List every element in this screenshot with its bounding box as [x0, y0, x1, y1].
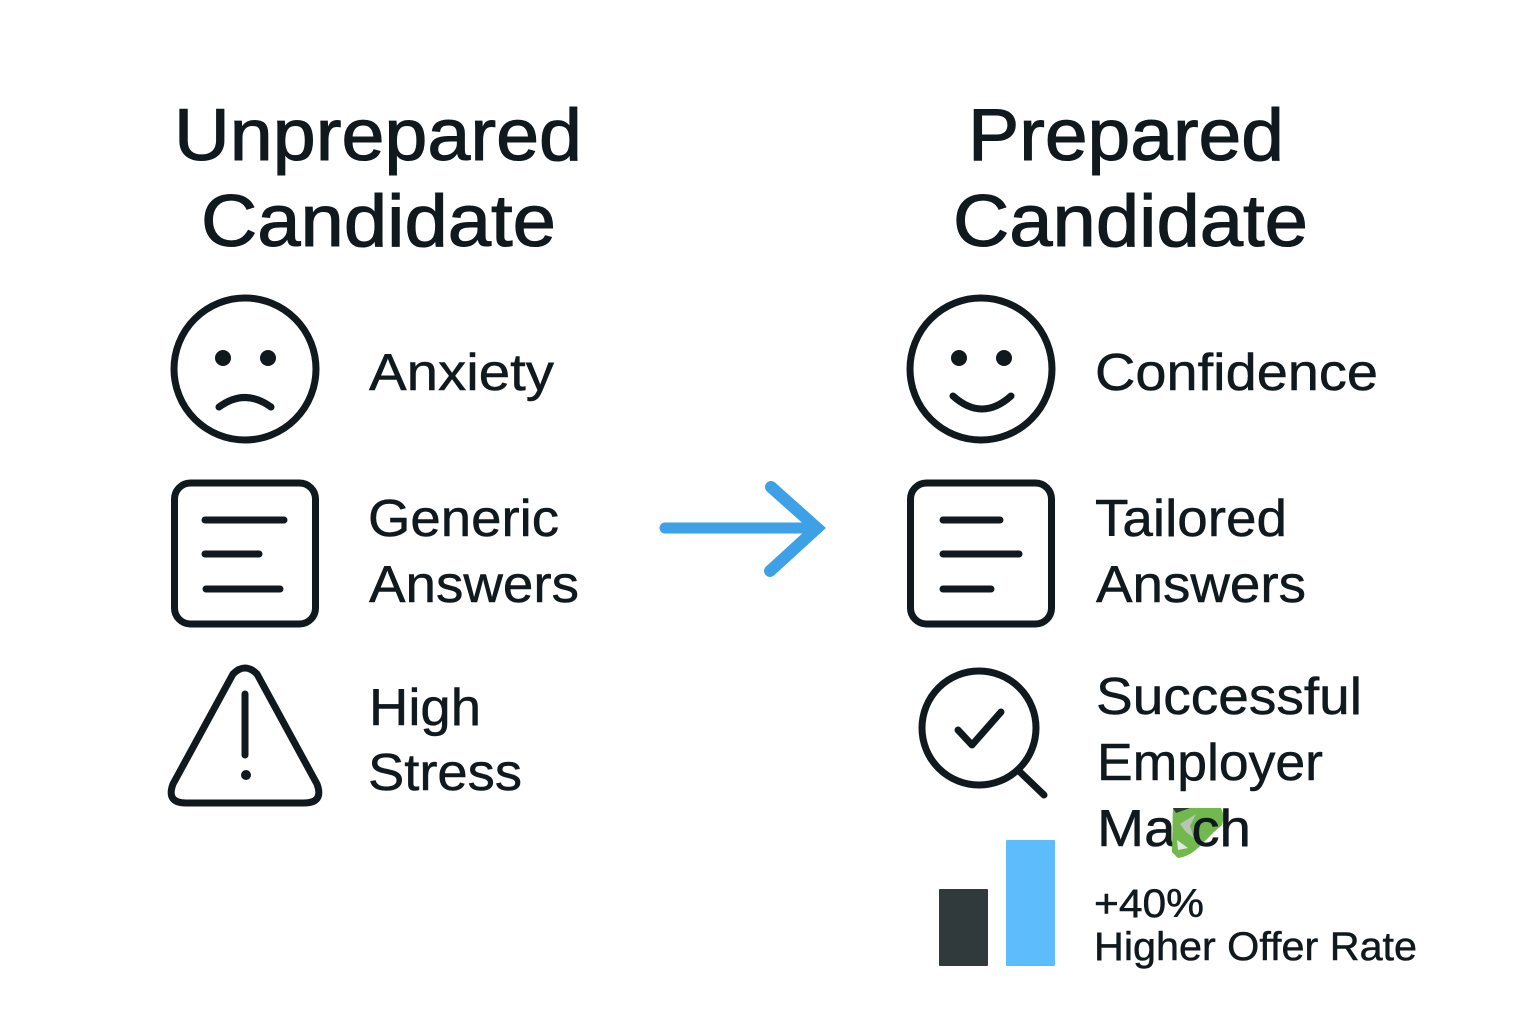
label: Anxiety: Anxiety: [369, 344, 554, 402]
callout: +40% Higher Offer Rate: +40%: [1094, 882, 1204, 926]
label: Successful Employer Match: Successful: [1096, 668, 1362, 726]
icon: tailored answers document: [910, 483, 1052, 624]
label: Successful Employer Match: Employer: [1097, 734, 1323, 792]
icon: generic answers document: [174, 483, 316, 624]
heading: Unprepared Candidate: [174, 95, 582, 262]
label: Successful Employer Match: Match: [1097, 800, 1251, 858]
smudge overlay hiding the t: [1172, 808, 1196, 858]
heading: Prepared Candidate: Candidate: [953, 181, 1308, 262]
green smudge artifact: [1172, 808, 1223, 858]
label: Generic Answers: Generic: [368, 490, 559, 548]
label: High Stress: High: [369, 679, 481, 737]
callout: +40% Higher Offer Rate: [1094, 882, 1417, 969]
label: Generic Answers: [368, 490, 579, 614]
heading: Prepared Candidate: [953, 95, 1308, 262]
label: High Stress: Stress: [368, 744, 522, 802]
icon: happy face: [910, 298, 1052, 440]
icon: magnifier with check: [922, 671, 1044, 795]
arrow: unprepared to prepared: [665, 487, 817, 571]
heading: Unprepared Candidate: Candidate: [201, 181, 556, 262]
heading: Unprepared Candidate: Unprepared: [174, 95, 582, 176]
label: Tailored Answers: Tailored: [1095, 490, 1287, 548]
icon: warning triangle: [171, 668, 319, 803]
heading: Prepared Candidate: Prepared: [968, 95, 1284, 176]
bar chart: offer rate: [939, 840, 1055, 966]
callout: +40% Higher Offer Rate: Higher Offer Rate: [1094, 925, 1417, 969]
label: Generic Answers: Answers: [369, 556, 579, 614]
label: High Stress: [368, 679, 522, 802]
icon: sad face: [174, 298, 316, 440]
label: Successful Employer Match: [1096, 668, 1362, 858]
label: Confidence: Confidence: [1095, 344, 1378, 402]
label: Tailored Answers: Answers: [1096, 556, 1306, 614]
label: Tailored Answers: [1095, 490, 1306, 614]
panel: unprepared candidate: [171, 95, 582, 803]
panel: prepared candidate: [910, 95, 1417, 969]
